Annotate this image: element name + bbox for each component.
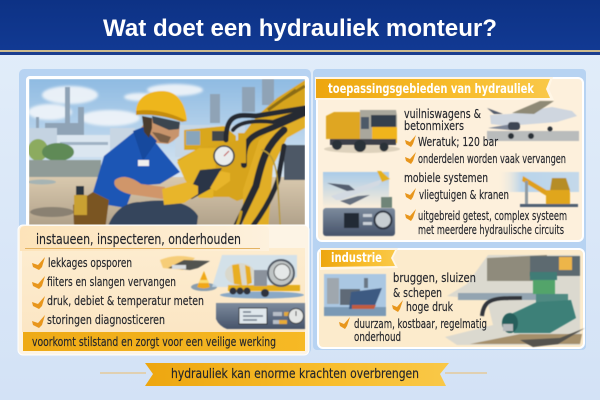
- icon: oil leak tool: [160, 256, 210, 270]
- text: bridges: [393, 271, 476, 300]
- check: [392, 300, 403, 312]
- icon: airplane: [323, 171, 392, 208]
- icon: control unit: [323, 208, 395, 236]
- item: planes and cranes: vliegtuigen & kranen: [419, 188, 509, 202]
- item: durable: onderhoud: [354, 330, 401, 344]
- check: [405, 188, 416, 200]
- check 2: [32, 276, 45, 289]
- icon: ship at harbour: [324, 274, 386, 316]
- check: [339, 317, 350, 329]
- gauge: [214, 146, 234, 166]
- bottom banner: [100, 363, 487, 386]
- check: [405, 135, 416, 147]
- text: garbage trucks: [404, 107, 481, 133]
- illustration: factory and bridge: [445, 255, 582, 345]
- title: Wat doet een hydrauliek monteur?: [103, 15, 497, 42]
- checklist: tasks: [32, 256, 204, 328]
- excavator: [284, 145, 305, 180]
- callout: prevention strip: [23, 332, 305, 351]
- icon: diagnostic device: [216, 303, 305, 329]
- icon: jet on runway: [487, 101, 579, 141]
- check: [405, 152, 416, 164]
- panel: right background: [313, 69, 586, 350]
- item: high pressure: hoge druk: [406, 300, 453, 314]
- banner: application areas: toepassingsgebieden van hydrauliek: [328, 82, 534, 97]
- item 2: fiiters en slangen vervangen: [47, 275, 176, 289]
- banner: industry: [320, 248, 398, 270]
- item 4: storingen diagnosticeren: [47, 313, 165, 327]
- header band: [0, 0, 600, 55]
- icon: hydraulic pump: [502, 272, 585, 347]
- icon: warning cone: [191, 271, 217, 291]
- divider heading: mobile systems: mobiele systemen: [404, 171, 488, 185]
- item: durable: [354, 317, 487, 344]
- heading: tasks: [20, 226, 269, 251]
- item 3: druk, debiet & temperatur meten: [47, 294, 204, 308]
- item: tested system: [418, 209, 567, 237]
- panel: tasks card: [18, 225, 309, 355]
- banner: application areas: [315, 77, 554, 100]
- text: bridges: bruggen, sluizen: [393, 271, 476, 285]
- icon: garbage truck: [324, 110, 400, 153]
- item: pressure: Weratuk; 120 bar: [418, 135, 498, 149]
- hoses: [215, 108, 305, 250]
- icon: concrete mixer truck: [212, 255, 304, 298]
- photo: technician at excavator: [28, 79, 305, 250]
- panel: left photo panel: [19, 69, 311, 354]
- tool belt: [73, 192, 109, 246]
- check: [405, 209, 416, 221]
- item: durable: duurzam, kostbaar, regelmatig: [354, 317, 487, 331]
- callout: prevention strip: voorkomt stilstand en zorgt voor een veilige werking: [32, 335, 276, 349]
- check 4: [32, 315, 45, 328]
- panel: industry: [318, 248, 585, 348]
- text: bridges: & schepen: [393, 286, 442, 300]
- banner: industry: industrie: [331, 251, 382, 266]
- check 1: [32, 257, 45, 270]
- check 3: [32, 296, 45, 309]
- panel: application areas: [315, 77, 583, 241]
- bottom banner: hydrauliek kan enorme krachten overbrengen: [171, 367, 419, 382]
- item 1: lekkages opsporen: [48, 256, 132, 270]
- text: garbage trucks: vuilniswagens &: [404, 107, 481, 121]
- icon: crane: [497, 172, 579, 207]
- worker: [138, 118, 180, 148]
- text: garbage trucks: betonmixers: [404, 119, 464, 133]
- heading: tasks: instaueen, inspecteren, onderhouden: [36, 232, 241, 248]
